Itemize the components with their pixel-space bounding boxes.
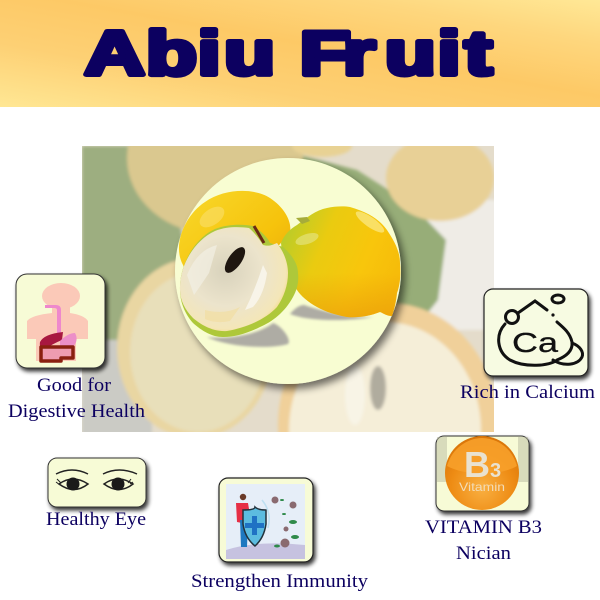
label: healthy eye: Healthy Eye: [46, 509, 146, 530]
icon: vitamin B3: Vitamin: [459, 480, 505, 494]
label: vitamin B3: Nician: [456, 543, 512, 564]
label: digestive: Digestive Health: [8, 401, 146, 422]
icon: calcium: [484, 289, 588, 376]
seed: [221, 244, 249, 276]
fruit shadows: [207, 305, 374, 347]
label: digestive: [8, 375, 146, 422]
label: vitamin B3: [425, 517, 542, 564]
label: immunity: Strengthen Immunity: [191, 571, 369, 592]
header banner: [0, 0, 600, 107]
icon: digestive system: [16, 274, 105, 368]
cut half fruit: [180, 225, 298, 337]
label: vitamin B3: VITAMIN B3: [425, 517, 542, 538]
label: digestive: Good for: [37, 375, 112, 396]
whole fruit back: [179, 191, 290, 290]
label: calcium: Rich in Calcium: [460, 382, 595, 403]
icon: vitamin B3: B: [464, 444, 490, 485]
icon: strengthen immunity: [219, 478, 313, 562]
icon: vitamin B3: [436, 436, 529, 511]
title: Abiu Fruit: [84, 18, 492, 88]
icon: healthy eye: [48, 458, 146, 507]
background photo: faded abiu fruits: [82, 146, 494, 432]
central circle with abiu fruits: [175, 158, 401, 384]
whole fruit right: [281, 206, 400, 317]
icon: vitamin B3: 3: [490, 460, 501, 482]
icon: calcium: Ca: [512, 327, 559, 358]
